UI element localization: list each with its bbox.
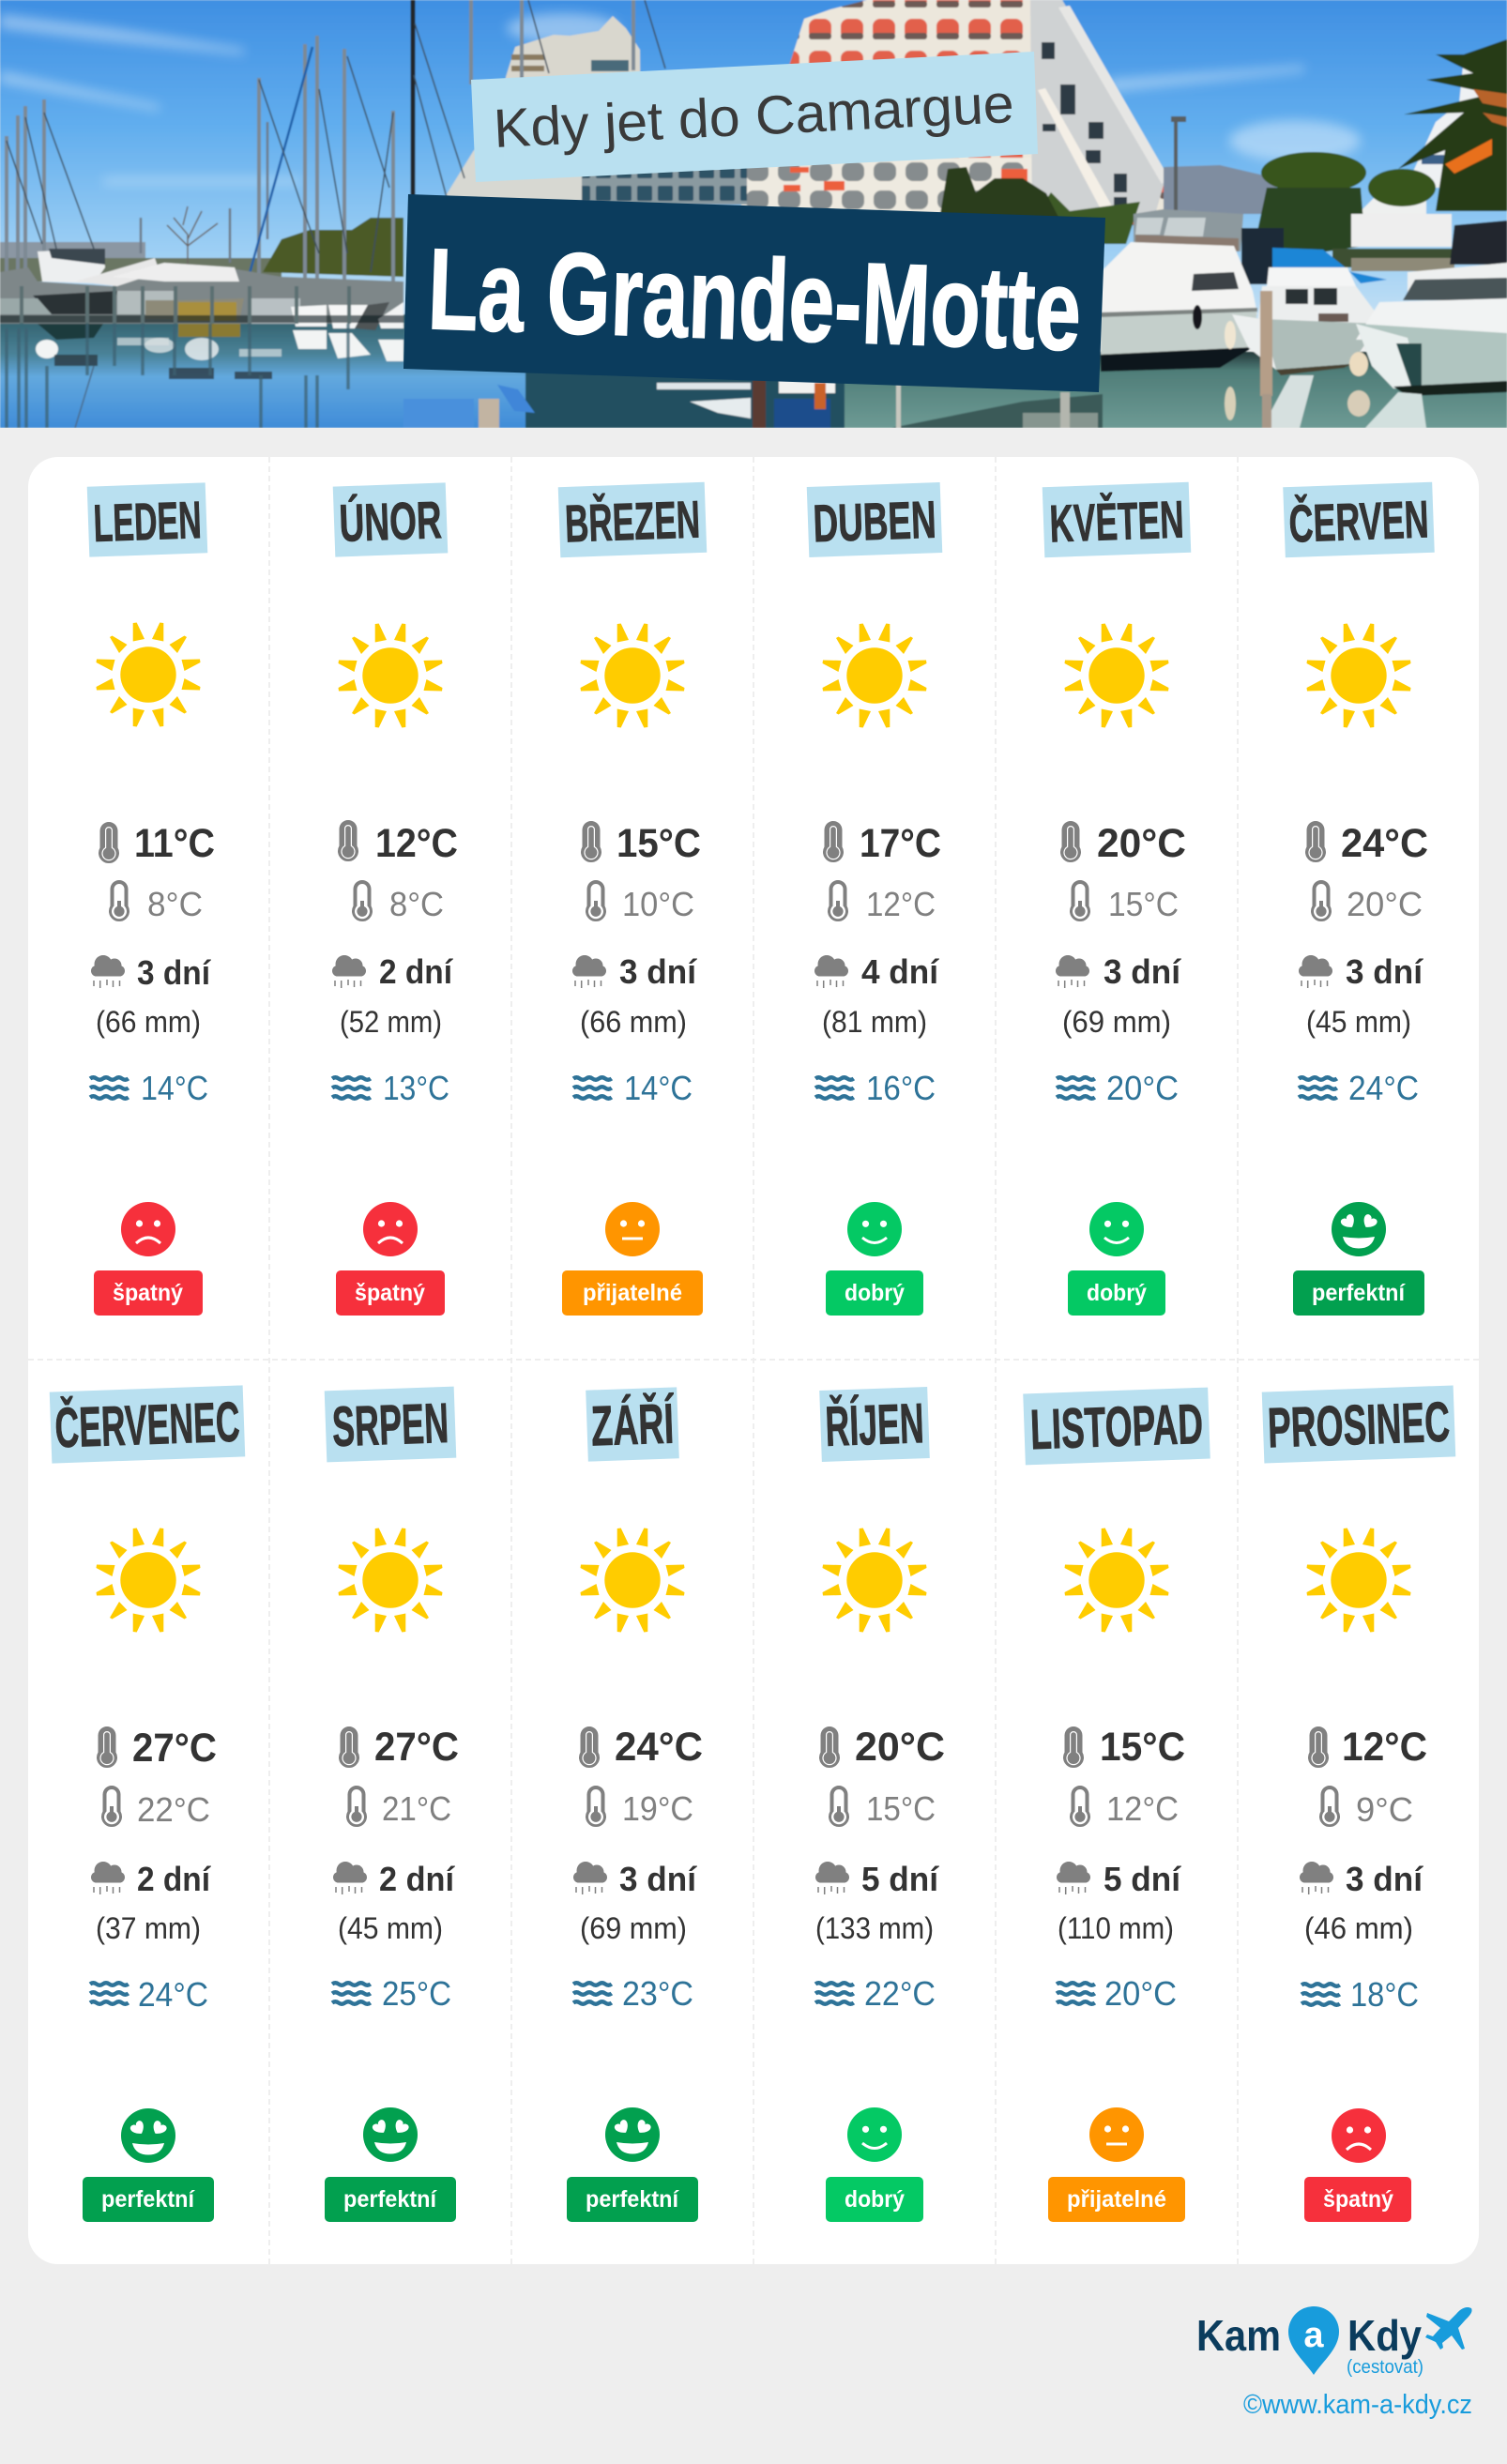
rainfall: (66 mm) (580, 1005, 687, 1039)
rainfall: (46 mm) (1304, 1911, 1413, 1945)
low temperature (1070, 1786, 1179, 1828)
rainy days (1299, 952, 1423, 991)
logo: Kam a Kdy (1196, 2306, 1472, 2420)
rainy days (1056, 952, 1181, 991)
rating (94, 1202, 203, 1316)
icon: sun (580, 1528, 685, 1633)
low temperature: 20°C (1347, 885, 1423, 923)
sea temperature (815, 1974, 936, 2013)
low temperature (1311, 880, 1423, 923)
month: BŘEZEN (558, 482, 707, 1316)
month: ZÁŘÍ (567, 1387, 703, 2222)
rating (826, 2107, 923, 2222)
high temperature: 12°C (375, 821, 458, 866)
rating: přijatelné (1067, 2186, 1166, 2213)
logo tagline: (cestovat) (1347, 2357, 1423, 2378)
month label (50, 1385, 245, 1464)
low temperature (101, 1786, 210, 1829)
rating: dobrý (1087, 1280, 1147, 1306)
rainy days: 3 dní (1104, 952, 1181, 991)
low temperature: 8°C (389, 885, 444, 923)
rainy days: 3 dní (137, 953, 211, 992)
sea temperature: 14°C (624, 1069, 693, 1107)
rating (1293, 1202, 1424, 1316)
rainy days: 2 dní (137, 1860, 211, 1898)
rating: špatný (113, 1280, 183, 1306)
rainy days: 4 dní (861, 952, 939, 991)
sea temperature: 24°C (1348, 1069, 1419, 1107)
icon: sun (1306, 623, 1411, 728)
low temperature: 8°C (147, 885, 203, 923)
month label (1283, 482, 1435, 557)
month label (807, 482, 942, 557)
sea temperature: 13°C (383, 1069, 449, 1107)
rating (83, 2108, 214, 2222)
rainy days (1057, 1860, 1181, 1898)
low temperature: 12°C (866, 885, 936, 923)
rating: špatný (355, 1280, 425, 1306)
rainy days (332, 952, 453, 991)
low temperature (586, 880, 694, 923)
icon: plane (1425, 2307, 1472, 2350)
month: PROSINEC (1262, 1385, 1455, 2222)
month label: ÚNOR (338, 490, 443, 553)
month label: LEDEN (92, 490, 203, 553)
month: ÚNOR (332, 482, 458, 1316)
title: subtitle strip (471, 52, 1038, 182)
high temperature: 20°C (855, 1725, 945, 1770)
sea temperature: 20°C (1104, 1974, 1177, 2013)
rainy days: 2 dní (379, 952, 453, 991)
month: ČERVEN (1283, 482, 1435, 1316)
main title text: La Grande-Motte (426, 225, 1083, 375)
rainfall: (37 mm) (96, 1911, 201, 1945)
rainfall: (66 mm) (96, 1005, 201, 1039)
rainy days (573, 1860, 697, 1898)
month label (558, 482, 707, 557)
panel: months grid (28, 457, 1479, 2264)
high temperature: 20°C (1097, 821, 1186, 866)
rating (1304, 2108, 1411, 2222)
low temperature: 15°C (866, 1789, 936, 1828)
month: KVĚTEN (1043, 482, 1191, 1316)
month label: ZÁŘÍ (590, 1392, 676, 1458)
icon: map pin (1288, 2306, 1339, 2375)
sea temperature (815, 1069, 936, 1107)
low temperature (109, 880, 203, 923)
month label (586, 1387, 679, 1462)
header photo: La Grande-Motte marina (0, 0, 1507, 428)
rating (562, 1202, 703, 1316)
rating: perfektní (343, 2186, 437, 2213)
rainfall: (133 mm) (815, 1911, 934, 1945)
rating: perfektní (586, 2186, 679, 2213)
rainy days (91, 1860, 211, 1898)
icon: sun (822, 623, 927, 728)
website: ©www.kam-a-kdy.cz (1243, 2390, 1472, 2420)
rainfall: (52 mm) (340, 1005, 442, 1039)
high temperature: 17°C (860, 821, 941, 866)
rainy days: 5 dní (1104, 1860, 1181, 1898)
sea temperature (1302, 1975, 1419, 2014)
rainy days (814, 952, 939, 991)
month label (1023, 1388, 1210, 1465)
month label: ČERVENEC (53, 1391, 241, 1459)
logo word Kam: Kam (1196, 2311, 1281, 2360)
sea temperature: 24°C (138, 1975, 208, 2014)
month: ČERVENEC (50, 1385, 245, 2222)
rainy days: 3 dní (1346, 1860, 1423, 1898)
high temperature: 15°C (1100, 1725, 1185, 1770)
icon: sun (96, 623, 201, 726)
high temperature (1063, 1725, 1185, 1770)
rating: přijatelné (583, 1280, 682, 1306)
rainfall: (81 mm) (822, 1005, 927, 1039)
month label: DUBEN (812, 490, 937, 553)
rating: perfektní (1312, 1280, 1406, 1306)
month label (87, 482, 207, 557)
icon: sun (1064, 623, 1169, 728)
rainfall: (69 mm) (580, 1911, 687, 1945)
low temperature (352, 880, 444, 923)
icon: sun (96, 1528, 201, 1633)
high temperature (339, 1725, 459, 1770)
sea temperature: 16°C (866, 1069, 936, 1107)
high temperature (338, 820, 458, 866)
month label (819, 1387, 930, 1462)
month: SRPEN (325, 1387, 459, 2222)
rating: dobrý (845, 1280, 905, 1306)
low temperature (1070, 880, 1179, 923)
low temperature: 10°C (622, 885, 694, 923)
high temperature: 27°C (374, 1725, 459, 1770)
subtitle text: Kdy jet do Camargue (492, 73, 1015, 160)
low temperature (1319, 1786, 1413, 1829)
low temperature (828, 880, 936, 923)
month label: LISTOPAD (1029, 1392, 1204, 1461)
month: LEDEN (87, 482, 215, 1316)
low temperature: 19°C (622, 1789, 693, 1828)
sea temperature: 22°C (864, 1974, 936, 2013)
low temperature (346, 1786, 451, 1828)
sea temperature (90, 1069, 208, 1107)
month label: KVĚTEN (1048, 490, 1185, 553)
rainy days: 3 dní (619, 1860, 697, 1898)
rating (325, 2107, 456, 2222)
month label (1043, 482, 1191, 557)
rainfall: (110 mm) (1058, 1911, 1174, 1945)
sea temperature (332, 1069, 449, 1107)
rainy days: 3 dní (619, 952, 697, 991)
month: ŘÍJEN (815, 1387, 945, 2222)
high temperature: 12°C (1342, 1725, 1427, 1770)
icon: map pin: a (1303, 2316, 1324, 2355)
rainy days (815, 1860, 939, 1898)
high temperature: 24°C (615, 1725, 703, 1770)
rating: perfektní (101, 2186, 195, 2213)
rainfall: (69 mm) (1062, 1005, 1171, 1039)
low temperature (829, 1786, 936, 1828)
icon: sun (1306, 1528, 1411, 1633)
rainy days (333, 1860, 455, 1898)
rating (336, 1202, 445, 1316)
rainy days: 3 dní (1346, 952, 1423, 991)
month label: SRPEN (331, 1392, 449, 1458)
high temperature: 11°C (134, 821, 215, 866)
sea temperature: 14°C (141, 1069, 208, 1107)
high temperature (823, 821, 941, 866)
icon: sun (338, 623, 443, 728)
month label (325, 1387, 456, 1462)
low temperature: 21°C (382, 1789, 451, 1828)
sea temperature (1299, 1069, 1419, 1107)
rating: špatný (1323, 2186, 1393, 2213)
rainy days: 2 dní (379, 1860, 455, 1898)
high temperature (1305, 821, 1428, 866)
rainy days (1300, 1860, 1423, 1898)
month label: ČERVEN (1287, 489, 1430, 554)
sea temperature (90, 1975, 208, 2014)
rating (1048, 2107, 1185, 2222)
high temperature: 27°C (132, 1726, 217, 1771)
month label: ŘÍJEN (824, 1392, 925, 1458)
rainfall: (45 mm) (338, 1911, 443, 1945)
title: main strip (403, 194, 1105, 392)
sea temperature: 18°C (1350, 1975, 1419, 2014)
sea temperature: 23°C (622, 1974, 693, 2013)
high temperature (99, 821, 215, 866)
rainy days: 5 dní (861, 1860, 939, 1898)
sea temperature: 25°C (382, 1974, 451, 2013)
month: DUBEN (807, 482, 942, 1316)
low temperature: 9°C (1356, 1790, 1413, 1829)
sea temperature (1057, 1069, 1179, 1107)
rainfall: (45 mm) (1306, 1005, 1411, 1039)
sea temperature (1057, 1974, 1177, 2013)
icon: sun (580, 623, 685, 728)
high temperature: 15°C (616, 821, 701, 866)
high temperature (1308, 1725, 1427, 1770)
low temperature: 15°C (1108, 885, 1179, 923)
low temperature: 22°C (137, 1790, 210, 1829)
rainy days (572, 952, 697, 991)
icon: sun (338, 1528, 443, 1633)
low temperature: 12°C (1106, 1789, 1179, 1828)
rating (826, 1202, 923, 1316)
high temperature (581, 821, 701, 866)
icon: sun (1064, 1528, 1169, 1633)
rainy days (91, 953, 211, 992)
sea temperature (573, 1069, 693, 1107)
sea temperature (332, 1974, 451, 2013)
icon: sun (822, 1528, 927, 1633)
rating (1068, 1202, 1165, 1316)
rating: dobrý (845, 2186, 905, 2213)
low temperature (586, 1786, 693, 1828)
month label: BŘEZEN (564, 490, 701, 553)
high temperature (97, 1726, 217, 1771)
month label (333, 482, 448, 557)
sea temperature (573, 1974, 693, 2013)
logo word Kdy: Kdy (1347, 2311, 1422, 2360)
month: LISTOPAD (1023, 1388, 1210, 2222)
rating (567, 2107, 698, 2222)
sea temperature: 20°C (1106, 1069, 1179, 1107)
high temperature: 24°C (1341, 821, 1428, 866)
